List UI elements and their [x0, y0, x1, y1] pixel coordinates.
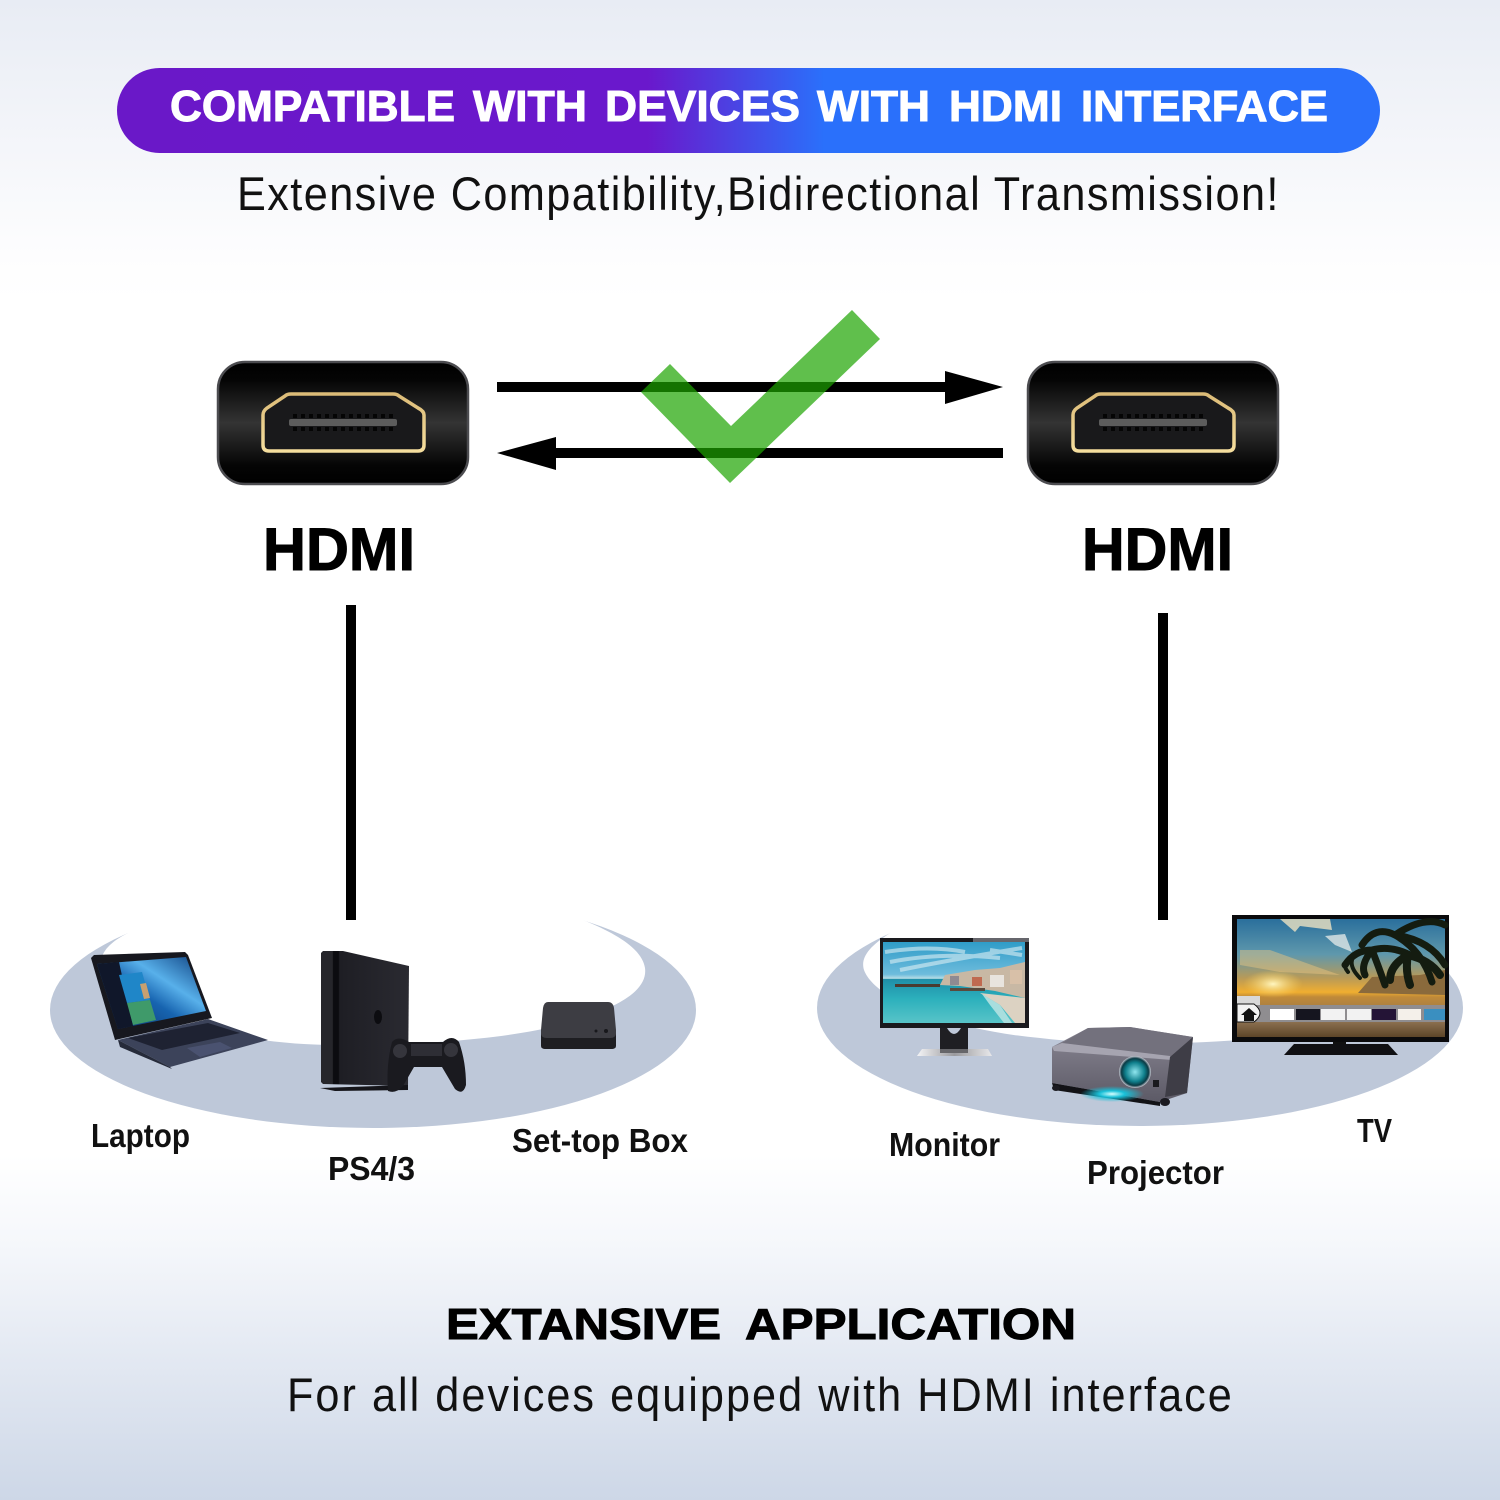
label: left HDMI: HDMI [263, 516, 415, 583]
left platform crescent [50, 880, 696, 1128]
title banner: DEVICES [605, 82, 800, 131]
label: Set-top Box: Set-top Box [512, 1122, 689, 1159]
subtitle: Extensive Compatibility,Bidirectional Transmission! [237, 167, 1278, 220]
label: PS4/3: PS4/3 [328, 1150, 415, 1187]
footer heading [446, 1300, 1076, 1349]
icon: right HDMI port [1028, 362, 1278, 484]
title banner: WITH [817, 82, 930, 131]
icon: monitor [880, 938, 1029, 1056]
arrow: left to right [497, 371, 1003, 404]
title banner: COMPATIBLE [170, 82, 455, 131]
label: Laptop: Laptop [91, 1117, 190, 1154]
label: TV: TV [1357, 1112, 1392, 1149]
footer heading: APPLICATION [745, 1300, 1076, 1349]
title banner [117, 68, 1380, 153]
icon: left HDMI port [218, 362, 468, 484]
footer text: For all devices equipped with HDMI interface [287, 1368, 1232, 1421]
icon: game console and controller [320, 951, 466, 1092]
footer heading: EXTANSIVE [446, 1300, 721, 1349]
left connector line [346, 605, 356, 920]
panel: display devices [817, 880, 1463, 1126]
label: right HDMI: HDMI [1082, 516, 1233, 583]
title banner: WITH [473, 82, 587, 131]
panel: source devices [50, 880, 696, 1128]
title banner: HDMI [949, 82, 1062, 131]
right platform crescent [817, 880, 1463, 1126]
label: Monitor: Monitor [889, 1126, 1000, 1163]
icon: television [1232, 915, 1449, 1055]
icon: laptop [91, 952, 268, 1069]
title banner: INTERFACE [1081, 82, 1328, 131]
icon: set-top box [541, 1002, 616, 1049]
label: Projector: Projector [1087, 1154, 1224, 1191]
icon: green check mark [641, 310, 880, 483]
icon: projector [1052, 1027, 1193, 1106]
arrow: right to left [497, 437, 1003, 470]
right connector line [1158, 613, 1168, 920]
